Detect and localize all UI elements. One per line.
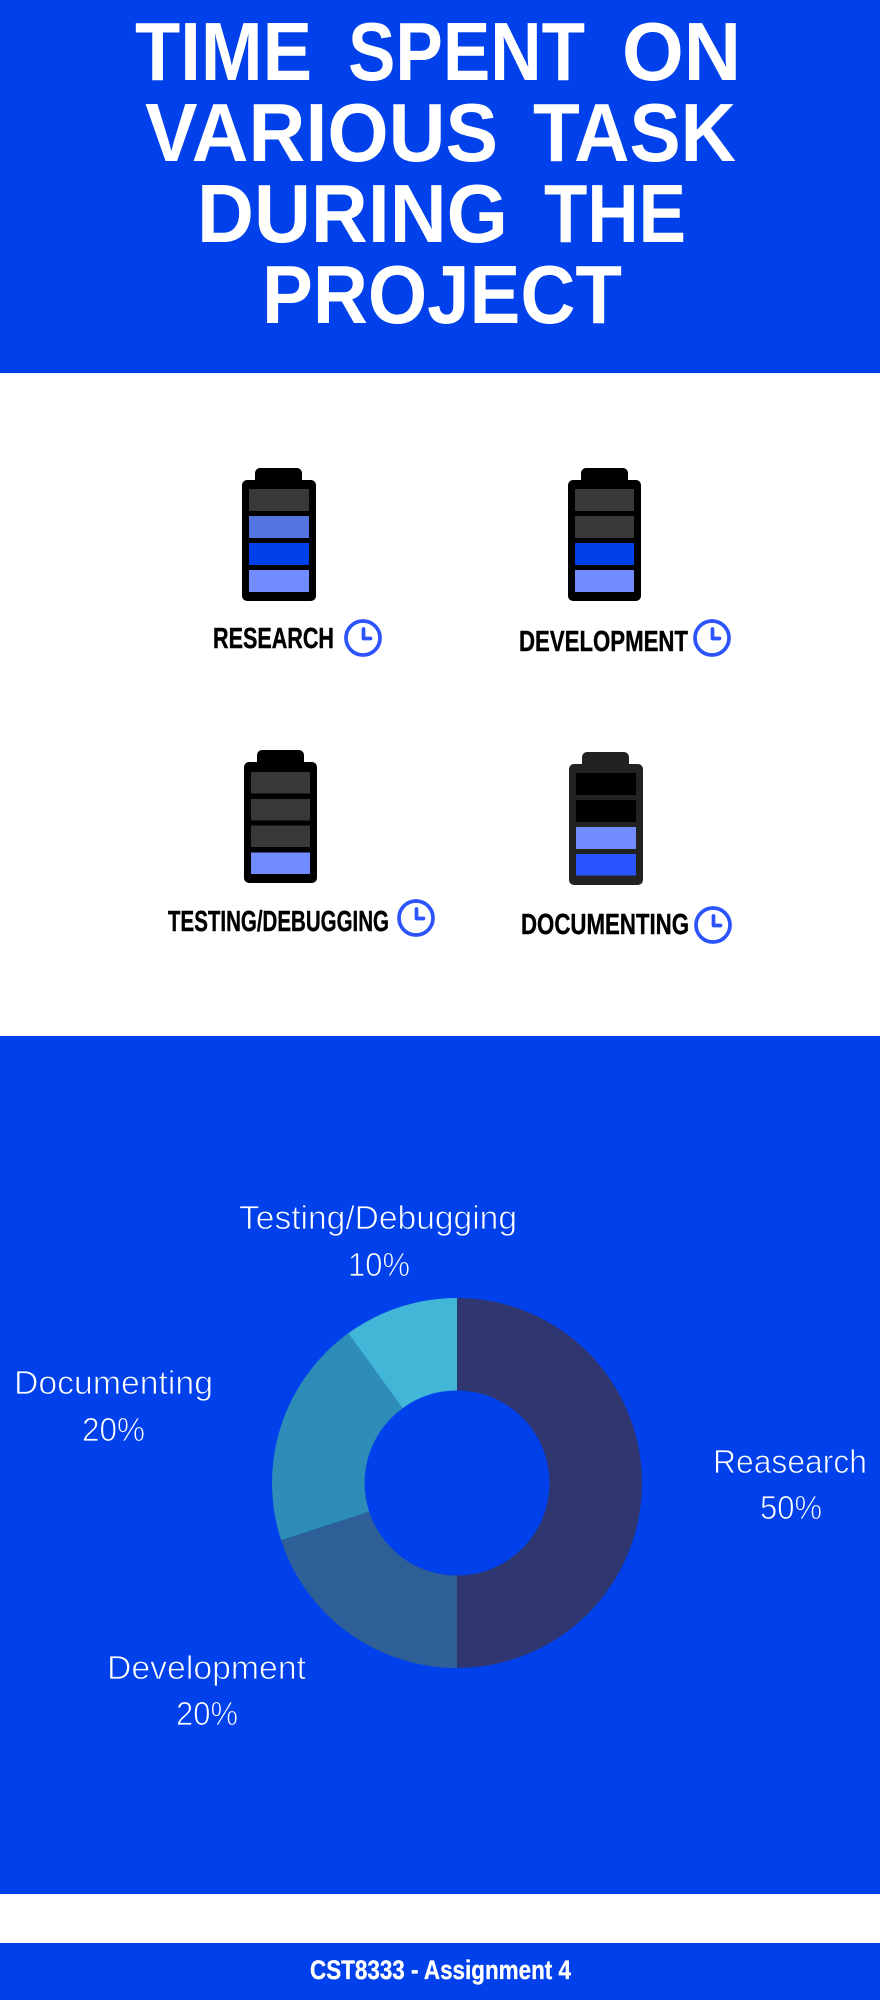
label: development 20%	[107, 1649, 306, 1732]
icon: documenting clock	[696, 908, 730, 942]
slice: testing 10%	[348, 1298, 457, 1408]
title: THE	[544, 167, 686, 260]
label: documenting 20%: Documenting	[14, 1364, 213, 1401]
icon: development clock	[695, 621, 729, 655]
title: PROJECT	[262, 248, 622, 341]
label: documenting 20%: 20%	[82, 1411, 145, 1448]
label: research 50%: 50%	[760, 1489, 822, 1526]
footer text: CST8333 - Assignment 4	[310, 1955, 571, 1985]
icon: research battery	[242, 468, 316, 601]
label: documenting: DOCUMENTING	[521, 909, 689, 941]
title: ON	[622, 5, 741, 98]
title: TIME	[135, 5, 312, 98]
label: testing/debugging: TESTING/DEBUGGING	[168, 906, 389, 938]
panel: research battery	[213, 468, 380, 655]
panel: testing/debugging battery	[168, 750, 433, 938]
label: documenting 20%	[14, 1364, 213, 1448]
icon: development battery	[568, 468, 641, 601]
label: research 50%	[713, 1443, 867, 1526]
icon: testing battery	[244, 750, 317, 883]
slice: research 50%	[457, 1298, 642, 1668]
label: development: DEVELOPMENT	[519, 626, 688, 658]
label: development 20%: 20%	[176, 1695, 238, 1732]
title: SPENT	[348, 5, 585, 98]
icon: testing clock	[399, 901, 433, 935]
title	[135, 5, 741, 341]
panel: footer	[0, 1943, 880, 2000]
label: testing/debugging 10%: Testing/Debugging	[239, 1199, 517, 1236]
panel: development battery	[519, 468, 729, 658]
icon: documenting battery	[569, 752, 643, 885]
panel: header	[0, 0, 880, 373]
label: testing/debugging 10%: 10%	[348, 1246, 410, 1283]
panel: documenting battery	[521, 752, 730, 942]
title: DURING	[197, 167, 508, 260]
slice: documenting 20%	[272, 1333, 403, 1540]
panel: chart section	[0, 1036, 880, 1894]
label: testing/debugging 10%	[239, 1199, 517, 1283]
label: research 50%: Reasearch	[713, 1443, 867, 1480]
donut chart	[272, 1298, 642, 1668]
label: development 20%: Development	[107, 1649, 306, 1686]
slice: development 20%	[281, 1512, 457, 1668]
label: research: RESEARCH	[213, 623, 334, 655]
title: VARIOUS	[145, 86, 498, 179]
icon: research clock	[346, 621, 380, 655]
title: TASK	[533, 86, 736, 179]
